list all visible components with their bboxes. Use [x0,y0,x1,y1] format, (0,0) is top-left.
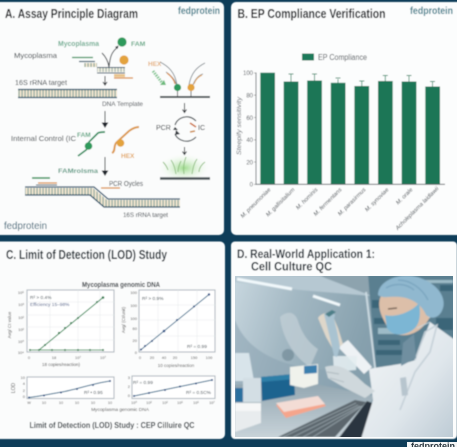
x axis labels: M. gallisitalium [265,187,297,218]
chart: log dilution curve [128,375,215,405]
amplified duplex: PCR Oycles [109,181,143,188]
white lab coat [361,322,455,439]
chart: linear standard curve: 60 [133,326,138,331]
chart: log standard curve: 10² [18,327,25,332]
y axis ticks: 80 [246,94,254,100]
chart: log dilution curve: 10² [162,401,168,405]
internal control probes: Internal Control (IC [11,134,77,143]
heading: panel A: A. Assay Principle Diagram [5,6,138,21]
x axis labels [240,186,441,232]
x axis labels: M. parasirmus [337,187,367,217]
x axis labels: M. synoviae [364,187,391,213]
chart: linear standard curve: Avg/ (Ct/unit) [121,306,126,333]
chart: log standard curve: 18 [52,355,57,360]
PCR IC cycle: IC [198,125,205,132]
chart: linear standard curve [121,290,215,368]
chart: linear standard curve: 20 [150,355,155,360]
HEX probes [148,61,210,97]
chart: log standard curve: 10⁰ [18,339,24,344]
arrow: to internal control [102,111,108,127]
chart: LOD curve: 0 [23,394,26,399]
gloved hand and beaker [333,356,357,372]
y axis ticks: 20 [246,160,254,166]
chart: log dilution curve: 10⁵ [193,401,199,405]
error bars [288,74,435,86]
probe binding group [14,37,146,78]
chart: LOD curve: 10 [108,401,112,405]
arrow: to PCR cycles [102,157,108,175]
heading: panel D: D. Real-World Application 1: [237,247,375,261]
panel: limit of detection study [0,242,225,439]
probe binding group: Mycoplasma [14,51,58,60]
arrow: to PCR cycle [182,103,186,112]
chart: log standard curve: 10⁷ [100,355,106,360]
chart: log standard curve: 10⁷ [75,355,81,360]
hood lights [237,279,292,289]
chart: log dilution curve: 0 [128,393,131,398]
chart: linear standard curve: R² > 0.9% [142,296,164,302]
bar chart [236,71,445,232]
x axis labels: Acholeplasma laidlawii [394,186,441,232]
chart: linear standard curve: 150 [191,355,198,360]
arrow: down to target [103,76,107,85]
chart: log dilution curve: 2 [128,384,131,389]
heading: panel B: B. EP Compliance Verification [238,6,386,21]
x axis labels: M. hominis [295,187,319,211]
surgical mask [385,303,420,335]
chart: LOD curve: 4 [23,381,26,386]
y axis ticks: 0 [250,182,254,188]
16S target strand: DNA Template [102,101,143,108]
chart: log dilution curve: 10⁷ [209,401,215,405]
chart: log standard curve: 18 copies/reaction) [42,362,81,367]
chart: LOD curve: 10 [91,401,95,405]
shared x axis label: Mycoplasma genomic DNA [91,407,150,413]
chart: linear standard curve: 0 [139,355,142,360]
chart: LOD curve [11,375,114,405]
chart: linear standard curve: 100 [130,290,138,295]
amplified duplex: FAMrolsma [58,168,98,175]
legend [302,53,367,62]
PCR IC cycle: PCR [156,125,171,132]
chart: linear standard curve: 100 [130,316,138,321]
chart: LOD curve: LOD [11,382,17,393]
chart: linear standard curve: 0 [135,350,138,355]
chart: log dilution curve: 10² [146,401,152,405]
16S target strand: 16S rRNA target [15,78,68,87]
panel: real-world application [231,242,457,439]
top sash [320,274,372,296]
chart: log standard curve: Efficiency 15–98% [30,302,70,308]
chart: LOD curve: 2 [23,388,26,393]
x axis labels: M. pneumoniae [240,187,273,220]
caption: Limit of Detection (LOD) Study : CEP Cilluire QC [30,420,194,430]
hair net [378,276,444,318]
chart: log standard curve: 10⁵ [18,290,24,295]
chart: log standard curve: 10³ [18,302,25,307]
photo: scientist in laminar flow hood [235,276,453,437]
chart: LOD curve: 10 [59,401,63,405]
chart: linear standard curve: 20 [133,338,138,343]
amplified duplex: 16S rRNA target [123,212,168,219]
arrow: to amplification [182,147,186,154]
y axis ticks: 100 [243,71,254,77]
chart: log standard curve: 10⁴ [18,350,24,355]
panel: EP compliance verification [231,2,457,235]
amplification curves [157,153,211,183]
hood glass [233,274,455,439]
chart group title: Mycoplasma genomic DNA [82,282,160,289]
reflected figure on glass [280,313,318,367]
chart: LOD curve: R² • 0.95 [84,390,103,396]
x axis labels: M. orale [395,187,415,206]
chart: linear standard curve: 20 [173,355,178,360]
pink well plate [276,398,326,418]
y axis label: Steepify sensitivity [236,96,243,155]
x axis labels: M. fermentans [313,187,343,218]
chart: log dilution curve: 10⁰ [131,401,137,405]
chart: log standard curve: 10² [18,315,25,320]
y axis ticks [243,71,254,188]
bars [260,73,440,184]
chart: log standard curve: 0 [28,355,31,360]
panel: assay principle diagram [0,2,224,235]
chart: log standard curve [7,290,114,367]
chart: LOD curve: W [27,401,31,405]
right room background [368,274,455,372]
internal control probes [11,127,139,160]
HEX probes: HEX [148,61,162,68]
chart: log dilution curve: 10⁵ [177,401,183,405]
chart: LOD curve: 10 [75,401,79,405]
chart: LOD curve: 10 [42,401,46,405]
chart: linear standard curve: 40 [162,355,167,360]
raised gloved hand and pipette [318,313,343,351]
panel: real-world application: Cell Culture QC [251,260,332,274]
chart: LOD curve: 10 [21,375,26,380]
probe binding group: FAM [131,41,146,48]
internal control probes: FAM [77,132,91,139]
chart: linear standard curve: 100 [130,303,138,308]
amplified duplex [25,168,180,219]
chart: log dilution curve: R² = 0.99 [133,380,153,386]
legend: EP Compliance [318,53,367,62]
brand: fedprotein bottom: fedprotein [4,221,47,232]
probe binding group: Mycoplasma [58,39,100,48]
brand: fedprotein top: fedprotein [178,6,220,17]
tip boxes and bottles [235,353,254,381]
y axis ticks: 60 [246,116,254,122]
heading: panel C: C. Limit of Detection (LOD) Study [6,247,168,262]
chart: linear standard curve: 10 copies/reaction [158,363,195,368]
bench [233,380,375,439]
internal control probes: HEX [121,153,135,160]
y axis ticks: 40 [246,138,254,144]
16S target strand [15,78,143,108]
chart: linear standard curve: R² = 0.99 [187,344,207,350]
face [379,288,432,335]
chart: linear standard curve: 100 [206,355,213,360]
chart: log dilution curve: 3 [128,375,131,380]
chart: log standard curve: R² > 0.4% [30,295,52,301]
chart: log standard curve: Avg/ Ct value [7,311,12,338]
chart: log dilution curve: R² = 0.5C% [186,390,212,396]
PCR IC cycle [156,117,205,141]
